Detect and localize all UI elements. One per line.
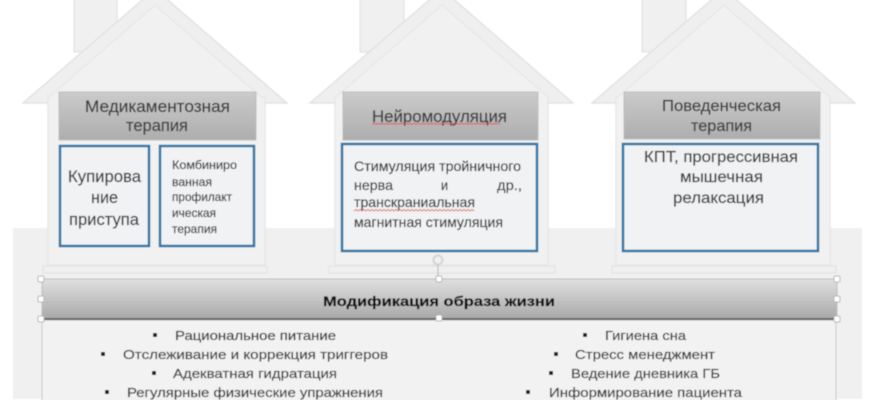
- box: neurostimulation methods: магнитная стимуляция: [354, 214, 503, 230]
- bar: lifestyle modification: [42, 279, 837, 320]
- box: neurostimulation methods: Стимуляция тройничного: [354, 158, 521, 174]
- house: drug therapy: [23, 0, 287, 273]
- list: right column: Стресс менеджмент: [575, 347, 715, 362]
- sill: [612, 266, 836, 273]
- box: neurostimulation methods: [342, 144, 537, 251]
- box: CBT and relaxation: КПТ, прогрессивная: [644, 149, 798, 166]
- heading: Нейромодуляция: [372, 108, 507, 126]
- sill: [329, 266, 555, 273]
- heading: Поведенческая: [662, 98, 781, 115]
- box: CBT and relaxation: релаксация: [673, 190, 764, 207]
- roof: [592, 0, 855, 265]
- house body: [335, 5, 548, 265]
- house: neuromodulation: [310, 0, 573, 273]
- box: neurostimulation methods: др.,: [497, 177, 522, 193]
- roof: [23, 0, 287, 265]
- box: attack relief: Купирова: [68, 168, 142, 186]
- box: attack relief: приступа: [69, 211, 140, 229]
- heading: [343, 92, 538, 140]
- heading: Медикаментозная: [85, 98, 230, 116]
- chimney: [74, 0, 117, 52]
- house body: [48, 5, 265, 265]
- box: neurostimulation methods: нерва: [354, 177, 393, 193]
- list: right column: Информирование пациента: [549, 385, 743, 400]
- chimney: [360, 0, 404, 52]
- house body: [616, 5, 830, 265]
- box: combined prophylaxis: терапия: [172, 222, 217, 236]
- panel: lifestyle list: [42, 320, 836, 400]
- heading: терапия: [691, 118, 752, 135]
- box: attack relief: [60, 146, 149, 246]
- box: combined prophylaxis: профилакт: [172, 190, 232, 204]
- heading: терапия: [126, 117, 188, 135]
- list: left column: Рациональное питание: [175, 328, 336, 343]
- list: right column: [526, 328, 743, 400]
- list: right column: Ведение дневника ГБ: [571, 366, 720, 381]
- box: neurostimulation methods: и: [441, 177, 448, 193]
- list: left column: Адекватная гидратация: [173, 366, 337, 381]
- chimney: [642, 0, 686, 52]
- bar: lifestyle modification: Модификация образа жизни: [323, 293, 555, 309]
- list: left column: [101, 328, 388, 400]
- list: right column: Гигиена сна: [605, 328, 687, 343]
- heading: [59, 92, 256, 140]
- box: combined prophylaxis: ическая: [172, 206, 216, 220]
- box: combined prophylaxis: ванная: [172, 175, 212, 189]
- box: CBT and relaxation: [623, 144, 818, 251]
- list: left column: Регулярные физические упражнения: [127, 385, 383, 400]
- box: neurostimulation methods: транскраниальная: [354, 194, 475, 210]
- box: combined prophylaxis: [160, 146, 254, 246]
- box: combined prophylaxis: Комбиниро: [172, 158, 237, 172]
- sill: [43, 266, 267, 273]
- box: attack relief: ние: [91, 189, 118, 207]
- selection handles: [38, 256, 840, 322]
- list: left column: Отслеживание и коррекция триггеров: [123, 347, 388, 362]
- roof: [310, 0, 573, 265]
- box: CBT and relaxation: мышечная: [680, 169, 763, 186]
- house: behavioural therapy: [592, 0, 855, 273]
- background band: [13, 228, 862, 399]
- heading: [624, 92, 820, 139]
